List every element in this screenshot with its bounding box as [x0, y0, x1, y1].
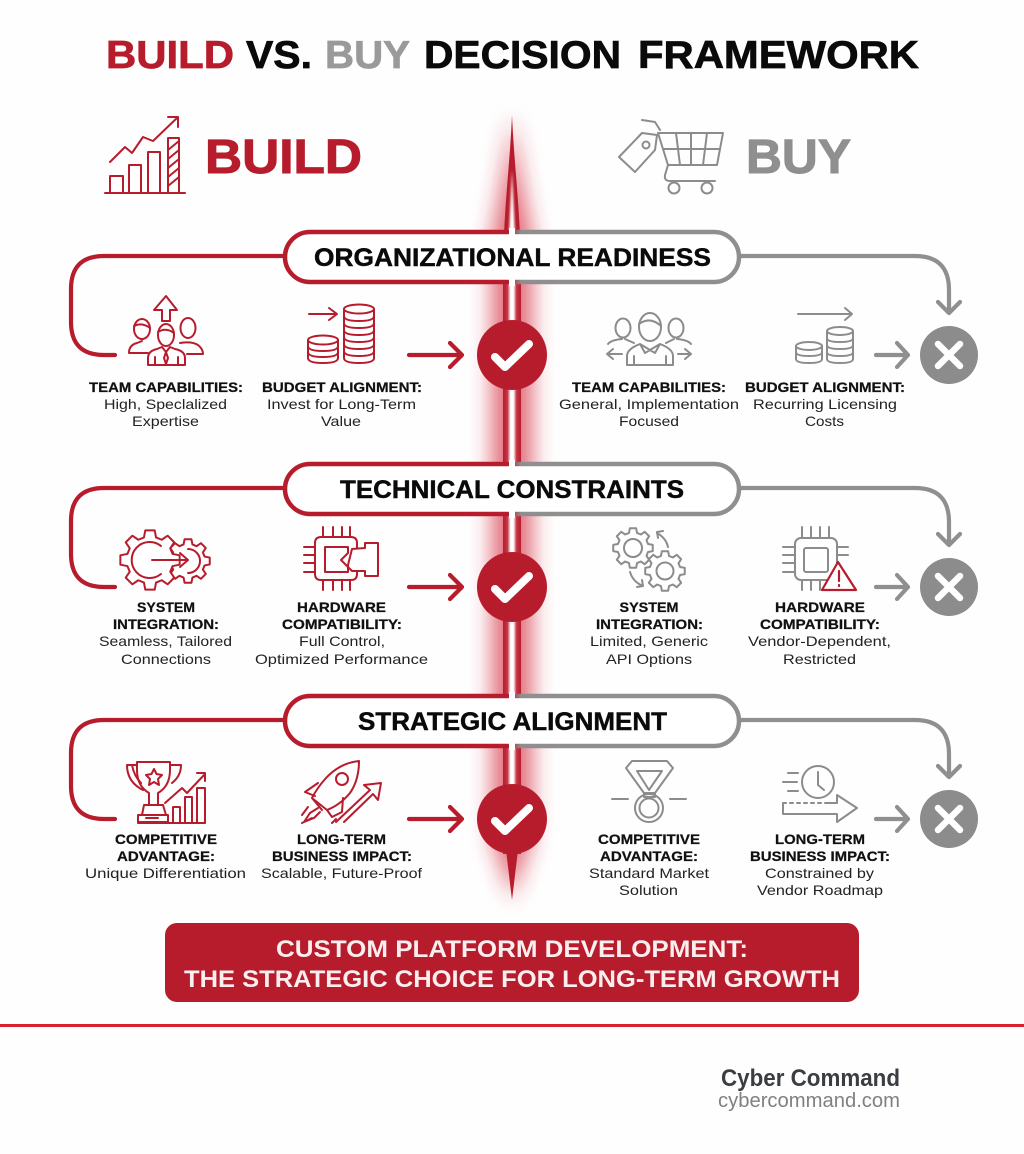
text: team capabilities build: High, Speclalized	[104, 396, 227, 412]
callout banner: THE STRATEGIC CHOICE FOR LONG-TERM GROWTH	[184, 966, 840, 993]
icon: trophy with growth	[127, 762, 205, 823]
text: long-term impact buy: BUSINESS IMPACT:	[750, 848, 890, 864]
text: long-term impact buy: Constrained by	[765, 865, 874, 881]
connector: row 3 buy	[739, 720, 960, 777]
arrow: row 3 buy	[876, 807, 908, 831]
title: FRAMEWORK	[638, 34, 919, 77]
text: hardware compatibility buy	[748, 599, 891, 667]
connector: row 1 build	[71, 256, 285, 355]
text: system integration buy: INTEGRATION:	[596, 616, 703, 632]
icon: general team	[607, 313, 691, 365]
text: team capabilities build: Expertise	[132, 413, 199, 429]
text: team capabilities build: TEAM CAPABILITIES:	[89, 379, 243, 395]
connector: row 1 buy	[739, 256, 960, 313]
icon: chip with warning	[783, 527, 856, 590]
icon: linked gears	[120, 530, 210, 590]
text: long-term impact buy	[750, 831, 890, 898]
text: budget alignment buy	[745, 379, 905, 429]
text: hardware compatibility buy: Restricted	[783, 651, 856, 667]
text: hardware compatibility build: COMPATIBILITY:	[282, 616, 402, 632]
text: budget alignment build: BUDGET ALIGNMENT:	[262, 379, 422, 395]
pill: strategic alignment	[285, 692, 739, 750]
cross badge: row 1	[920, 326, 978, 384]
arrow: row 1 buy	[876, 343, 908, 367]
cross badge: row 3	[920, 790, 978, 848]
text: hardware compatibility build	[255, 599, 428, 667]
text: budget alignment buy: Recurring Licensing	[753, 396, 897, 412]
text: competitive advantage buy: COMPETITIVE	[598, 831, 700, 847]
arrow: row 3 build	[409, 807, 462, 831]
callout banner: CUSTOM PLATFORM DEVELOPMENT:	[276, 936, 748, 963]
text: long-term impact build	[261, 831, 422, 881]
arrow: row 2 build	[409, 575, 462, 599]
footer brand	[718, 1065, 900, 1112]
heading: buy: BUY	[746, 131, 851, 184]
text: hardware compatibility build: Optimized Performance	[255, 651, 428, 667]
text: competitive advantage build	[85, 831, 246, 881]
text: hardware compatibility buy: COMPATIBILITY:	[760, 616, 880, 632]
text: long-term impact build: BUSINESS IMPACT:	[272, 848, 412, 864]
text: competitive advantage buy: Solution	[619, 882, 678, 898]
connector: row 3 build	[71, 720, 285, 819]
text: system integration build: Connections	[121, 651, 211, 667]
text: team capabilities buy: Focused	[619, 413, 679, 429]
text: budget alignment build: Invest for Long-Term	[267, 396, 416, 412]
text: team capabilities buy: TEAM CAPABILITIES:	[572, 379, 726, 395]
text: budget alignment buy: Costs	[805, 413, 844, 429]
icon: budget investment stacks	[308, 304, 374, 363]
icon: medal	[612, 761, 686, 822]
text: competitive advantage buy: Standard Market	[589, 865, 709, 881]
text: budget alignment build: Value	[321, 413, 361, 429]
pill: organizational readiness	[285, 228, 739, 286]
check badge: row 1	[477, 320, 547, 390]
title: BUY	[325, 34, 410, 77]
text: competitive advantage build: ADVANTAGE:	[117, 848, 215, 864]
icon: growth chart	[105, 117, 185, 193]
heading: build: BUILD	[205, 131, 362, 184]
pill: strategic alignment: STRATEGIC ALIGNMENT	[358, 708, 667, 736]
text: system integration buy: SYSTEM	[620, 599, 678, 615]
title: DECISION	[424, 34, 621, 77]
text: hardware compatibility buy: HARDWARE	[775, 599, 865, 615]
text: system integration build	[99, 599, 232, 667]
footer brand: Cyber Command	[721, 1065, 900, 1092]
text: competitive advantage build: COMPETITIVE	[115, 831, 217, 847]
text: system integration buy: Limited, Generic	[590, 633, 708, 649]
icon: specialized team	[129, 296, 203, 365]
callout banner	[165, 923, 859, 1002]
text: budget alignment buy: BUDGET ALIGNMENT:	[745, 379, 905, 395]
text: budget alignment build	[262, 379, 422, 429]
text: system integration buy: API Options	[606, 651, 692, 667]
text: competitive advantage build: Unique Differentiation	[85, 865, 246, 881]
text: hardware compatibility build: HARDWARE	[297, 599, 386, 615]
text: long-term impact buy: Vendor Roadmap	[757, 882, 883, 898]
pill: organizational readiness: ORGANIZATIONAL READINESS	[314, 244, 711, 272]
text: competitive advantage buy: ADVANTAGE:	[600, 848, 698, 864]
icon: generic gears	[613, 528, 685, 591]
connector: row 2 build	[71, 488, 285, 587]
icon: chip with camera block	[304, 527, 378, 590]
central spine	[492, 115, 532, 900]
icon: shopping cart with tag	[619, 120, 723, 194]
icon: rocket	[302, 761, 381, 823]
connector: row 2 buy	[739, 488, 960, 545]
text: long-term impact buy: LONG-TERM	[775, 831, 865, 847]
text: system integration build: SYSTEM	[137, 599, 195, 615]
text: competitive advantage buy	[589, 831, 709, 898]
text: hardware compatibility buy: Vendor-Dependent,	[748, 633, 891, 649]
text: team capabilities buy	[559, 379, 739, 429]
text: long-term impact build: LONG-TERM	[297, 831, 386, 847]
pill: technical constraints	[285, 460, 739, 518]
text: long-term impact build: Scalable, Future-Proof	[261, 865, 422, 881]
check badge: row 3	[477, 784, 547, 854]
text: system integration buy	[590, 599, 708, 667]
icon: clock and delayed arrow	[783, 766, 857, 822]
text: team capabilities build	[89, 379, 243, 429]
arrow: row 1 build	[409, 343, 462, 367]
pill: technical constraints: TECHNICAL CONSTRAINTS	[340, 476, 684, 504]
text: team capabilities buy: General, Implementation	[559, 396, 739, 412]
text: system integration build: Seamless, Tailored	[99, 633, 232, 649]
cross badge: row 2	[920, 558, 978, 616]
title: VS.	[246, 34, 312, 77]
arrow: row 2 buy	[876, 575, 908, 599]
text: system integration build: INTEGRATION:	[113, 616, 219, 632]
title: BUILD	[106, 34, 234, 77]
footer brand: cybercommand.com	[718, 1090, 900, 1112]
check badge: row 2	[477, 552, 547, 622]
title	[106, 34, 919, 77]
icon: recurring cost stacks	[796, 308, 853, 363]
text: hardware compatibility build: Full Control,	[299, 633, 385, 649]
